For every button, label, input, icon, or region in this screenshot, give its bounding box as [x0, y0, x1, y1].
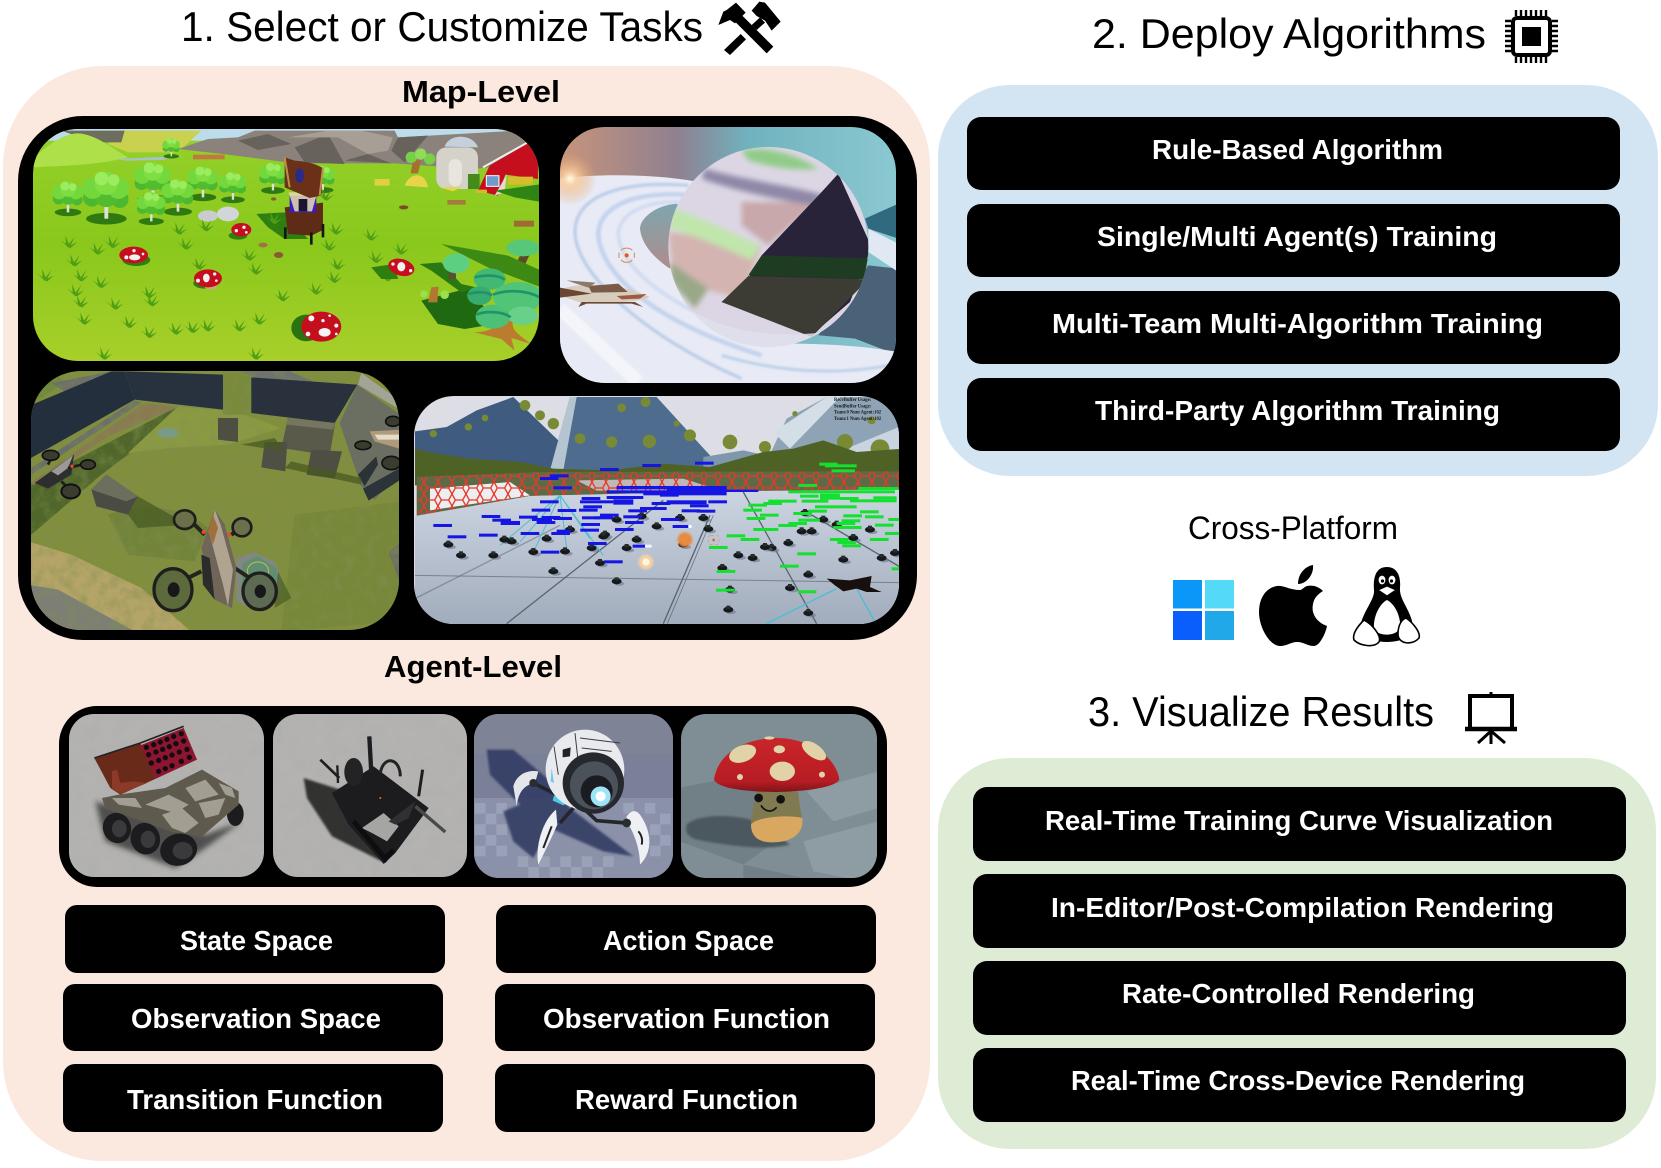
button: Single/Multi Agent(s) Training: Single/Multi Agent(s) Training — [1097, 221, 1497, 252]
button: Third-Party Algorithm Training — [967, 378, 1620, 451]
button: Action Space: Action Space — [603, 925, 774, 956]
icon: Windows logo — [1173, 580, 1234, 640]
title: 3. Visualize Results: 3. Visualize Results — [1088, 688, 1434, 735]
heading: Agent-Level: Agent-Level — [384, 649, 562, 684]
monster tower — [285, 157, 323, 245]
button: Real-Time Cross-Device Rendering: Real-Time Cross-Device Rendering — [1071, 1065, 1525, 1096]
button: Observation Function: Observation Function — [543, 1003, 830, 1034]
big helipad — [236, 552, 283, 610]
large drone — [154, 510, 276, 611]
image: swarm battle with team markers: Team:0 Num Agent:102 — [834, 411, 882, 416]
button: Reward Function: Reward Function — [575, 1084, 798, 1115]
button: State Space: State Space — [180, 925, 333, 956]
mushrooms — [119, 223, 416, 342]
button: Multi-Team Multi-Algorithm Training: Multi-Team Multi-Algorithm Training — [1052, 308, 1543, 339]
button: Observation Space: Observation Space — [131, 1003, 381, 1034]
button: Rate-Controlled Rendering: Rate-Controlled Rendering — [1122, 978, 1475, 1009]
image: rocket launcher vehicle — [69, 714, 264, 877]
button: In-Editor/Post-Compilation Rendering — [973, 874, 1626, 948]
button: Real-Time Training Curve Visualization — [973, 787, 1626, 861]
button: Real-Time Training Curve Visualization: Real-Time Training Curve Visualization — [1045, 805, 1553, 836]
image: armed tracked robot — [273, 714, 467, 877]
button: Rule-Based Algorithm — [967, 117, 1620, 190]
button: In-Editor/Post-Compilation Rendering: In-Editor/Post-Compilation Rendering — [1051, 892, 1554, 923]
button: Real-Time Cross-Device Rendering — [973, 1048, 1626, 1122]
panel: visualize results — [938, 758, 1656, 1149]
left drone — [35, 450, 95, 498]
image: drones in walled arena — [28, 368, 403, 635]
right drone — [355, 416, 403, 470]
image: white spider robot — [470, 708, 677, 883]
image: swarm battle with team markers — [410, 392, 903, 628]
button: Observation Space — [63, 984, 443, 1051]
icon: presentation board — [1465, 692, 1517, 744]
icon: crossed hammers — [718, 2, 781, 55]
panel: deploy algorithms — [938, 85, 1658, 476]
image: swarm battle with team markers: SendBuffer Usage: — [834, 404, 872, 409]
image: cartoon mushroom — [678, 711, 878, 883]
button: Multi-Team Multi-Algorithm Training — [967, 291, 1620, 364]
button: Transition Function — [63, 1064, 443, 1132]
heading: Cross-Platform: Cross-Platform — [1188, 510, 1398, 546]
image: swarm battle with team markers: Team:1 Num Agent:102 — [834, 417, 882, 422]
image: ringed planet space map — [560, 127, 896, 383]
spaceship — [560, 280, 650, 307]
button: Reward Function — [495, 1064, 875, 1132]
panel: agent images — [59, 706, 887, 887]
teal trees — [420, 240, 543, 351]
button: Rule-Based Algorithm: Rule-Based Algorithm — [1152, 134, 1443, 165]
image: low-poly farm map with mushrooms — [28, 124, 543, 366]
button: State Space — [65, 905, 445, 973]
button: Observation Function — [495, 984, 875, 1051]
panel: map images — [18, 116, 917, 640]
heading: Map-Level: Map-Level — [402, 74, 560, 109]
title: 1. Select or Customize Tasks: 1. Select or Customize Tasks — [181, 3, 703, 50]
button: Transition Function: Transition Function — [127, 1084, 383, 1115]
button: Single/Multi Agent(s) Training — [967, 204, 1620, 277]
button: Rate-Controlled Rendering — [973, 961, 1626, 1035]
icon: processor chip — [1505, 10, 1558, 63]
icon: Apple logo — [1259, 565, 1327, 646]
title: 2. Deploy Algorithms: 2. Deploy Algorithms — [1092, 10, 1486, 57]
icon: Linux penguin — [1354, 567, 1419, 646]
image: swarm battle with team markers: RecvBuffer Usage: — [834, 398, 872, 403]
panel: customize tasks — [3, 66, 930, 1161]
button: Third-Party Algorithm Training: Third-Party Algorithm Training — [1095, 395, 1500, 426]
button: Action Space — [496, 905, 876, 973]
